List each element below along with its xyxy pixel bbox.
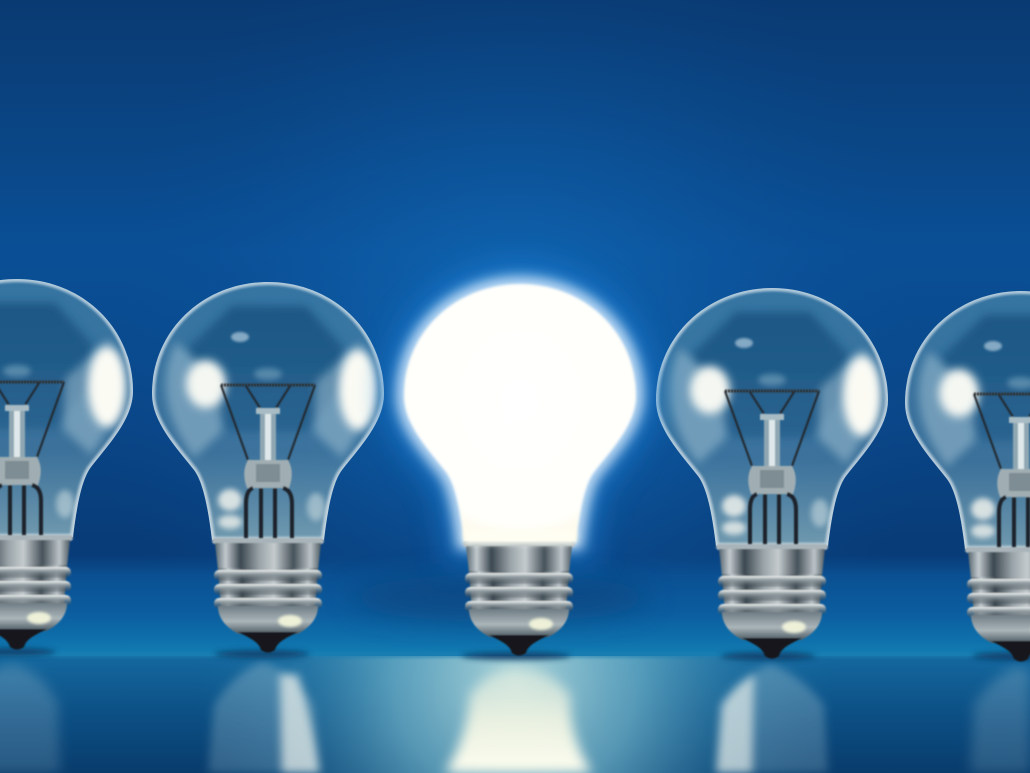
bulb: left clear	[148, 282, 388, 652]
bulb: far left, cropped	[0, 279, 137, 650]
glow halo	[404, 284, 636, 542]
glass lit	[404, 284, 636, 542]
bulb: right clear	[652, 288, 892, 658]
bulb: far right, cropped	[901, 291, 1030, 662]
reflection: far right bulb	[970, 666, 1030, 773]
reflective table surface	[0, 555, 1030, 773]
screw base	[463, 541, 575, 656]
base top glow	[464, 530, 576, 544]
contact shadows under bulbs	[0, 648, 1030, 660]
reflection: glowing bulb	[445, 668, 592, 773]
reflection: far left bulb	[0, 664, 60, 773]
bulb: center glowing	[404, 284, 636, 656]
reflection: right bulb	[716, 664, 828, 773]
background wall	[0, 0, 1030, 600]
reflection: left bulb	[208, 662, 320, 773]
